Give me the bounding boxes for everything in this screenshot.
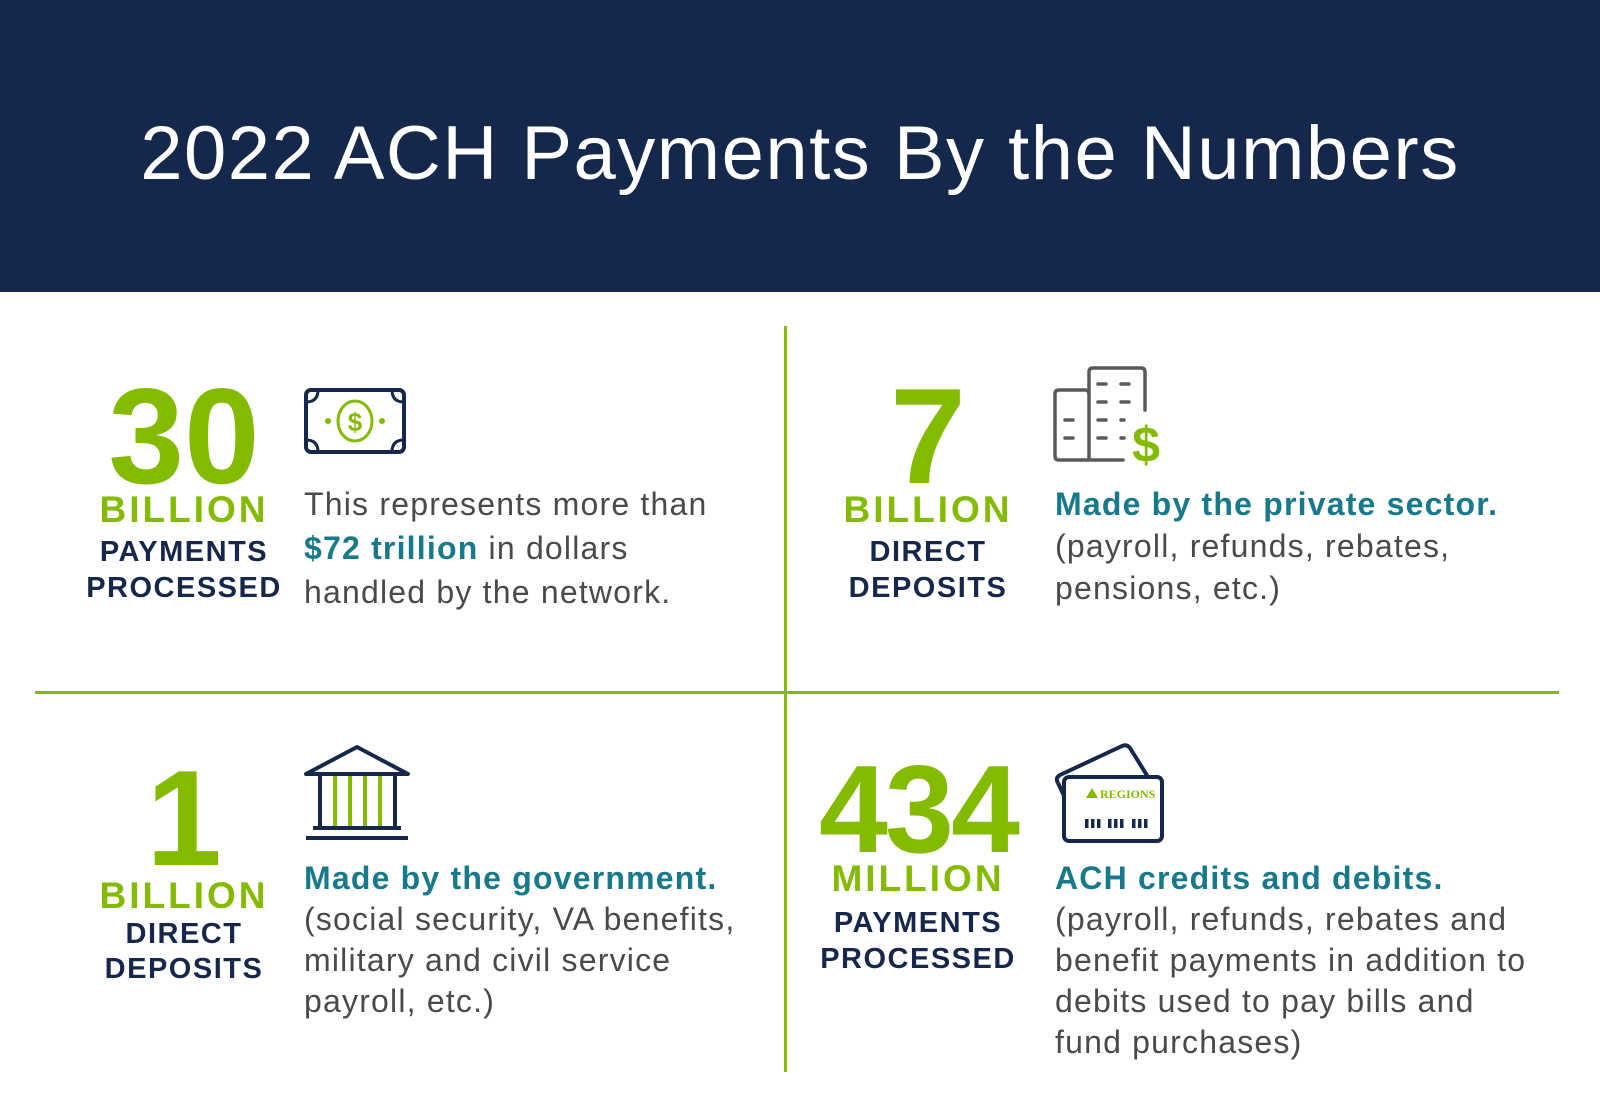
text: $72 trillion in dollars <box>304 530 629 566</box>
icon: buildings with dollar <box>1053 366 1160 466</box>
label <box>86 536 282 604</box>
vertical divider <box>784 326 787 1072</box>
text: (payroll, refunds, rebates and <box>1055 901 1507 937</box>
icon: bank building <box>304 745 410 840</box>
text: payroll, etc.) <box>304 983 495 1019</box>
icon: money bill: $ <box>348 407 363 437</box>
label: DEPOSITS <box>849 572 1007 604</box>
text <box>304 860 735 1019</box>
unit: BILLION <box>100 489 268 530</box>
panel: 1 billion direct deposits <box>100 742 735 1019</box>
text: handled by the network. <box>304 574 671 610</box>
number 7: 7 <box>890 360 966 512</box>
icon: Regions cards <box>1054 743 1164 843</box>
label: PROCESSED <box>820 943 1016 975</box>
title: 2022 ACH Payments By the Numbers <box>140 111 1460 196</box>
header banner <box>0 0 1600 292</box>
unit: MILLION <box>831 858 1005 899</box>
unit: BILLION <box>844 489 1012 530</box>
icon: money bill <box>304 388 406 454</box>
text <box>304 486 708 610</box>
text: (payroll, refunds, rebates, <box>1055 528 1450 564</box>
label <box>105 918 263 985</box>
icon: Regions cards: REGIONS <box>1100 787 1156 801</box>
panel: 7 billion direct deposits <box>844 360 1498 606</box>
text: military and civil service <box>304 942 671 978</box>
text: This represents more than <box>304 486 708 522</box>
horizontal divider <box>35 691 1559 694</box>
label: DEPOSITS <box>105 953 263 985</box>
text: Made by the government. <box>304 860 717 896</box>
panel: 434 million payments <box>819 741 1526 1060</box>
panel: 30 billion payments <box>86 360 708 610</box>
label: PROCESSED <box>86 572 282 604</box>
text: benefit payments in addition to <box>1055 942 1526 978</box>
text: fund purchases) <box>1055 1024 1302 1060</box>
text: Made by the private sector. <box>1055 486 1498 522</box>
text <box>1055 860 1526 1060</box>
number 1: 1 <box>146 742 222 894</box>
label: DIRECT <box>870 536 986 568</box>
text: pensions, etc.) <box>1055 570 1281 606</box>
label: DIRECT <box>126 918 242 950</box>
number 30: 30 <box>108 360 260 512</box>
text: ACH credits and debits. <box>1055 860 1444 896</box>
label <box>849 536 1007 604</box>
label <box>820 907 1016 975</box>
text: debits used to pay bills and <box>1055 983 1475 1019</box>
number 434: 434 <box>819 741 1017 879</box>
label: PAYMENTS <box>834 907 1002 939</box>
text <box>1055 486 1498 606</box>
unit: BILLION <box>100 875 268 916</box>
text: (social security, VA benefits, <box>304 901 735 937</box>
label: PAYMENTS <box>100 536 268 568</box>
